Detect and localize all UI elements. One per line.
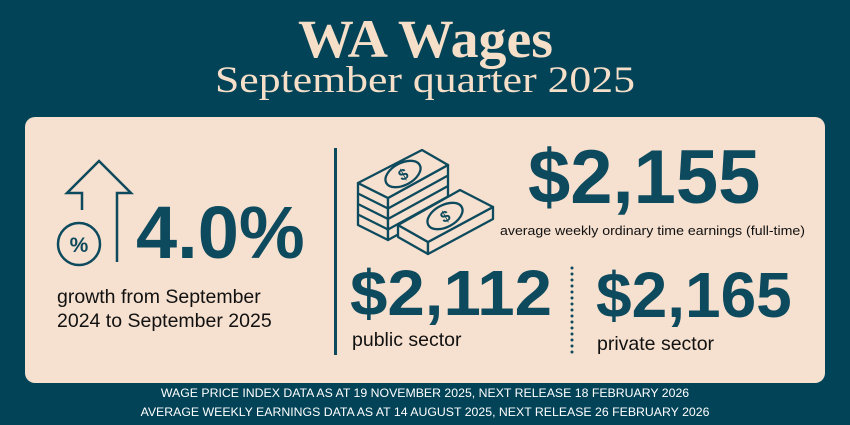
icon: money stack: $	[396, 166, 412, 185]
subtitle: September quarter 2025	[215, 60, 635, 101]
title	[215, 9, 635, 101]
stat: private sector $2,165: private sector	[597, 333, 715, 355]
title: WA Wages	[298, 9, 553, 69]
icon: up arrow with percent	[58, 161, 131, 265]
dotted divider	[570, 268, 574, 356]
text: growth description: 2024 to September 2025	[57, 310, 272, 332]
text: average weekly earnings label: average weekly ordinary time earnings (full-time)	[500, 223, 805, 238]
icon: money stack	[358, 150, 493, 254]
text: growth description: growth from September	[57, 286, 261, 308]
stat: 4.0%: 4.0%	[136, 191, 305, 274]
stat: private sector $2,165: $2,165	[596, 259, 792, 331]
panel: main	[25, 117, 825, 383]
icon: money stack: $	[438, 208, 454, 227]
stat: $2,155: $2,155	[528, 135, 760, 220]
footer notes: AVERAGE WEEKLY EARNINGS DATA AS AT 14 AUGUST 2025, NEXT RELEASE 26 FEBRUARY 2026	[141, 405, 710, 419]
stat: public sector $2,112: $2,112	[350, 257, 552, 329]
icon: up arrow with percent: %	[70, 234, 89, 257]
stat: public sector $2,112: public sector	[352, 329, 462, 351]
footer notes: WAGE PRICE INDEX DATA AS AT 19 NOVEMBER 2025, NEXT RELEASE 18 FEBRUARY 2026	[161, 386, 689, 400]
divider	[334, 148, 337, 355]
